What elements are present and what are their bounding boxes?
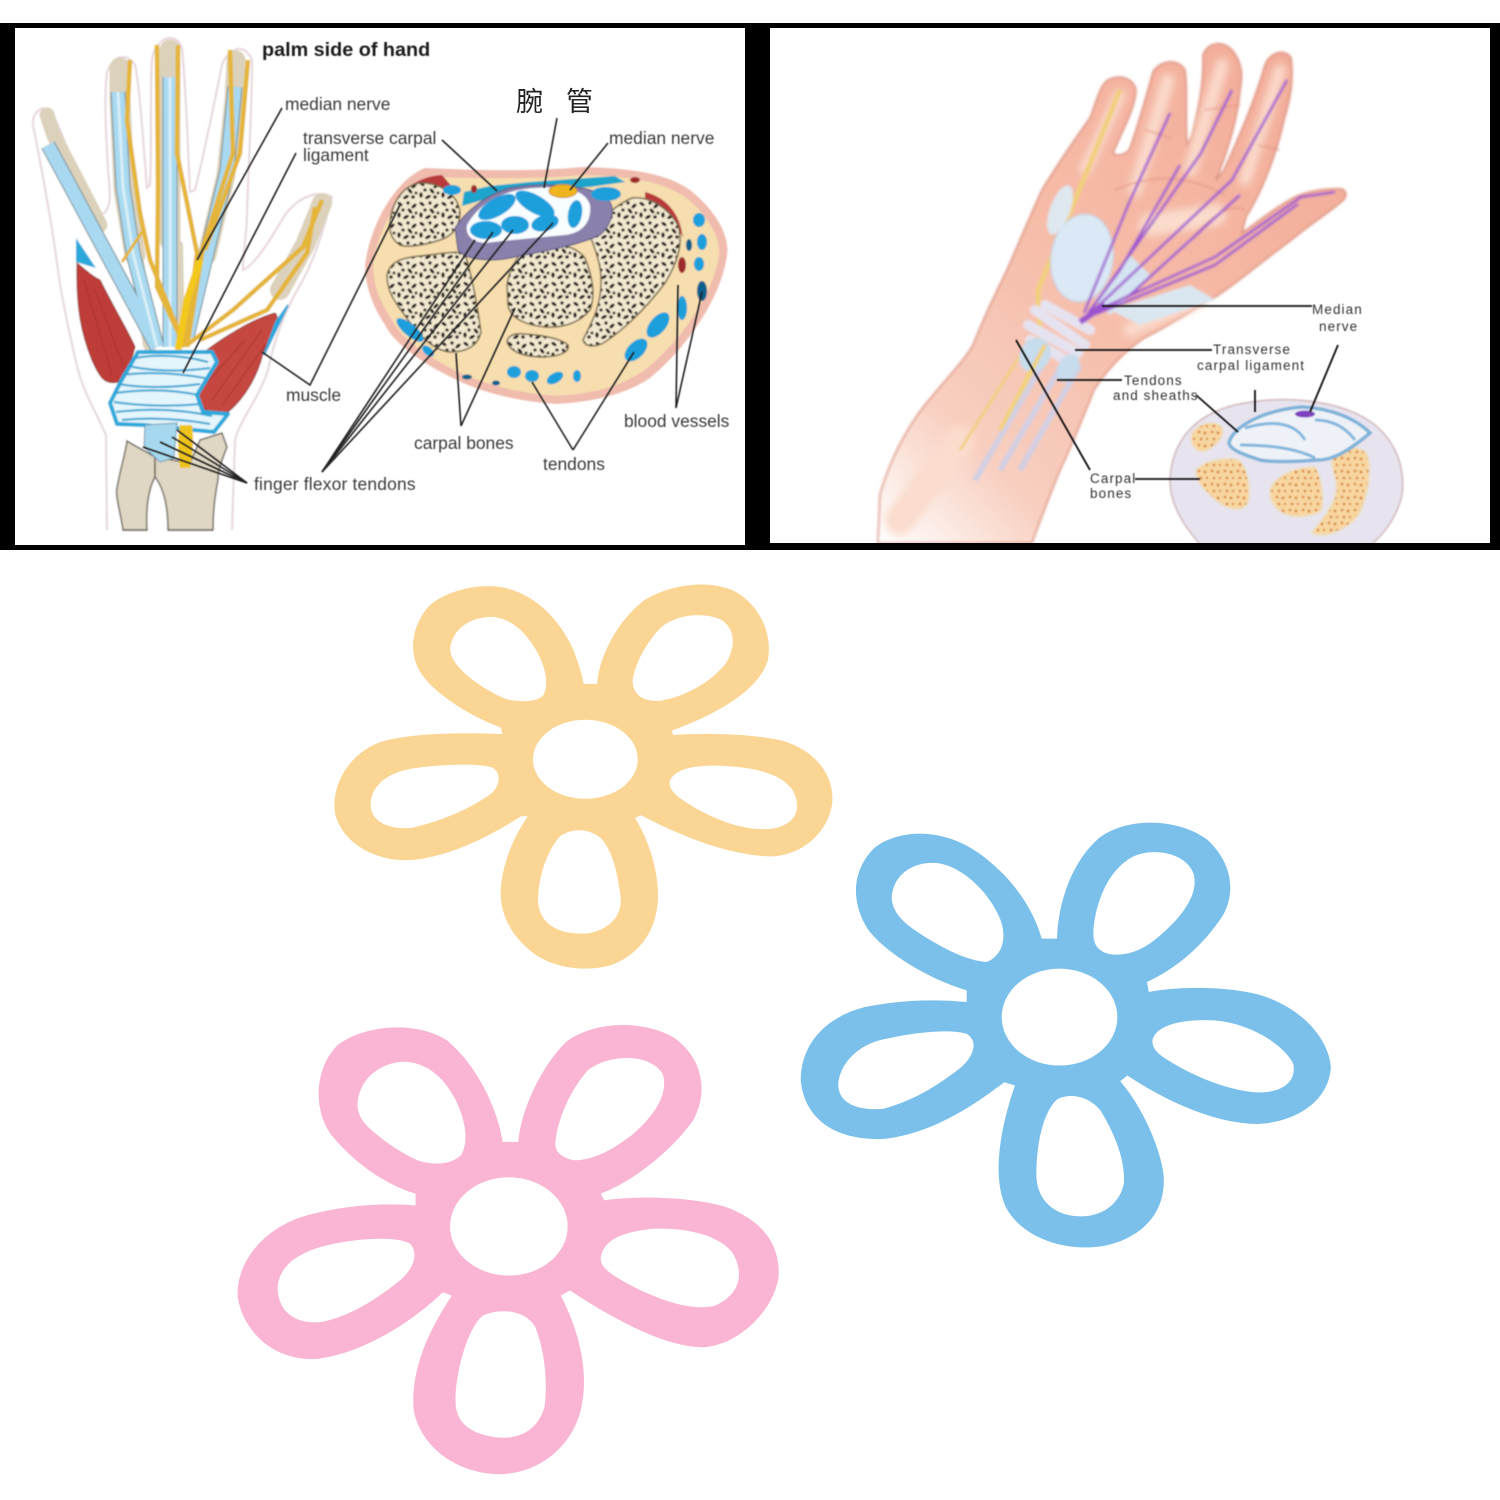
carpal bones xyxy=(387,183,680,357)
labels: left panel annotations: median nerve xyxy=(285,94,390,114)
tendon sheaths xyxy=(1229,407,1370,462)
leader lines: hand diagram xyxy=(1016,306,1338,479)
ligament band xyxy=(462,176,625,206)
labels: left panel annotations: transverse carpal xyxy=(303,128,436,148)
median nerve xyxy=(549,184,577,198)
label: palm side of hand: palm side of hand xyxy=(262,39,430,61)
carpal bones orange xyxy=(1191,423,1370,535)
illustration: wrist cross-section xyxy=(1170,400,1403,560)
wrist outer tissue xyxy=(365,167,727,404)
bursa bubble xyxy=(1048,212,1116,304)
labels: hand diagram: bones xyxy=(1090,486,1132,501)
labels: left panel annotations: muscle xyxy=(286,385,341,405)
black frame behind the anatomy panels xyxy=(0,23,1500,550)
leader lines: left panel xyxy=(143,108,702,483)
label: carpal tunnel in Chinese: 腕 xyxy=(516,87,543,117)
illustration: palm skeleton, tendons and nerves xyxy=(33,38,332,530)
labels: hand diagram: Transverse xyxy=(1213,342,1291,357)
flexor tendons xyxy=(470,185,584,239)
wrist bones xyxy=(117,433,227,530)
yellow ulnar nerve xyxy=(960,90,1120,450)
wrist tendons xyxy=(975,360,1080,480)
finger tendons xyxy=(48,77,235,347)
flower exerciser: yellow xyxy=(334,584,832,969)
label: carpal tunnel in Chinese, second character: 管 xyxy=(566,87,593,117)
panel: palm side of hand and carpal tunnel cross-section xyxy=(15,28,745,545)
soft highlights on fingers and palm xyxy=(900,65,1280,520)
labels: hand diagram: Median xyxy=(1312,302,1363,317)
labels: left panel annotations xyxy=(254,94,730,494)
median nerve branches purple xyxy=(1080,80,1335,322)
ligament bands xyxy=(1028,305,1090,362)
transverse carpal ligament xyxy=(110,352,228,432)
illustration: hand and forearm xyxy=(878,44,1346,543)
skin xyxy=(878,44,1346,543)
finger bones xyxy=(47,50,322,345)
panel: hand with median nerve xyxy=(770,28,1490,560)
flower exerciser: pink xyxy=(238,1025,779,1474)
tendon sheath xyxy=(455,185,612,260)
wrist tendons and nerve xyxy=(144,423,177,462)
flower exerciser: blue xyxy=(801,823,1331,1247)
labels: left panel annotations: finger flexor tendons xyxy=(254,474,416,494)
finger creases xyxy=(1115,105,1280,240)
labels: left panel annotations: blood vessels xyxy=(624,411,730,431)
median nerve branches xyxy=(122,45,322,350)
hand outline xyxy=(33,38,332,530)
labels: hand diagram: Carpal xyxy=(1090,471,1136,486)
carpal tunnel xyxy=(467,187,590,243)
labels: left panel annotations: median nerve xyxy=(609,128,714,148)
labels: hand diagram xyxy=(1090,302,1363,501)
labels: hand diagram: and sheaths xyxy=(1113,388,1199,403)
labels: hand diagram: Tendons xyxy=(1124,373,1183,388)
labels: left panel annotations: ligament xyxy=(303,145,369,165)
labels: left panel annotations: tendons xyxy=(543,454,605,474)
muscle right xyxy=(198,313,277,414)
outer tendons and vessels xyxy=(393,185,707,387)
labels: hand diagram: carpal ligament xyxy=(1197,358,1305,373)
outer tissue xyxy=(1170,400,1403,560)
labels: left panel annotations: carpal bones xyxy=(414,433,514,453)
labels: hand diagram: nerve xyxy=(1319,319,1358,334)
muscle left xyxy=(77,263,135,383)
muscle fibres xyxy=(84,280,265,406)
illustration: carpal tunnel cross-section xyxy=(365,167,727,404)
